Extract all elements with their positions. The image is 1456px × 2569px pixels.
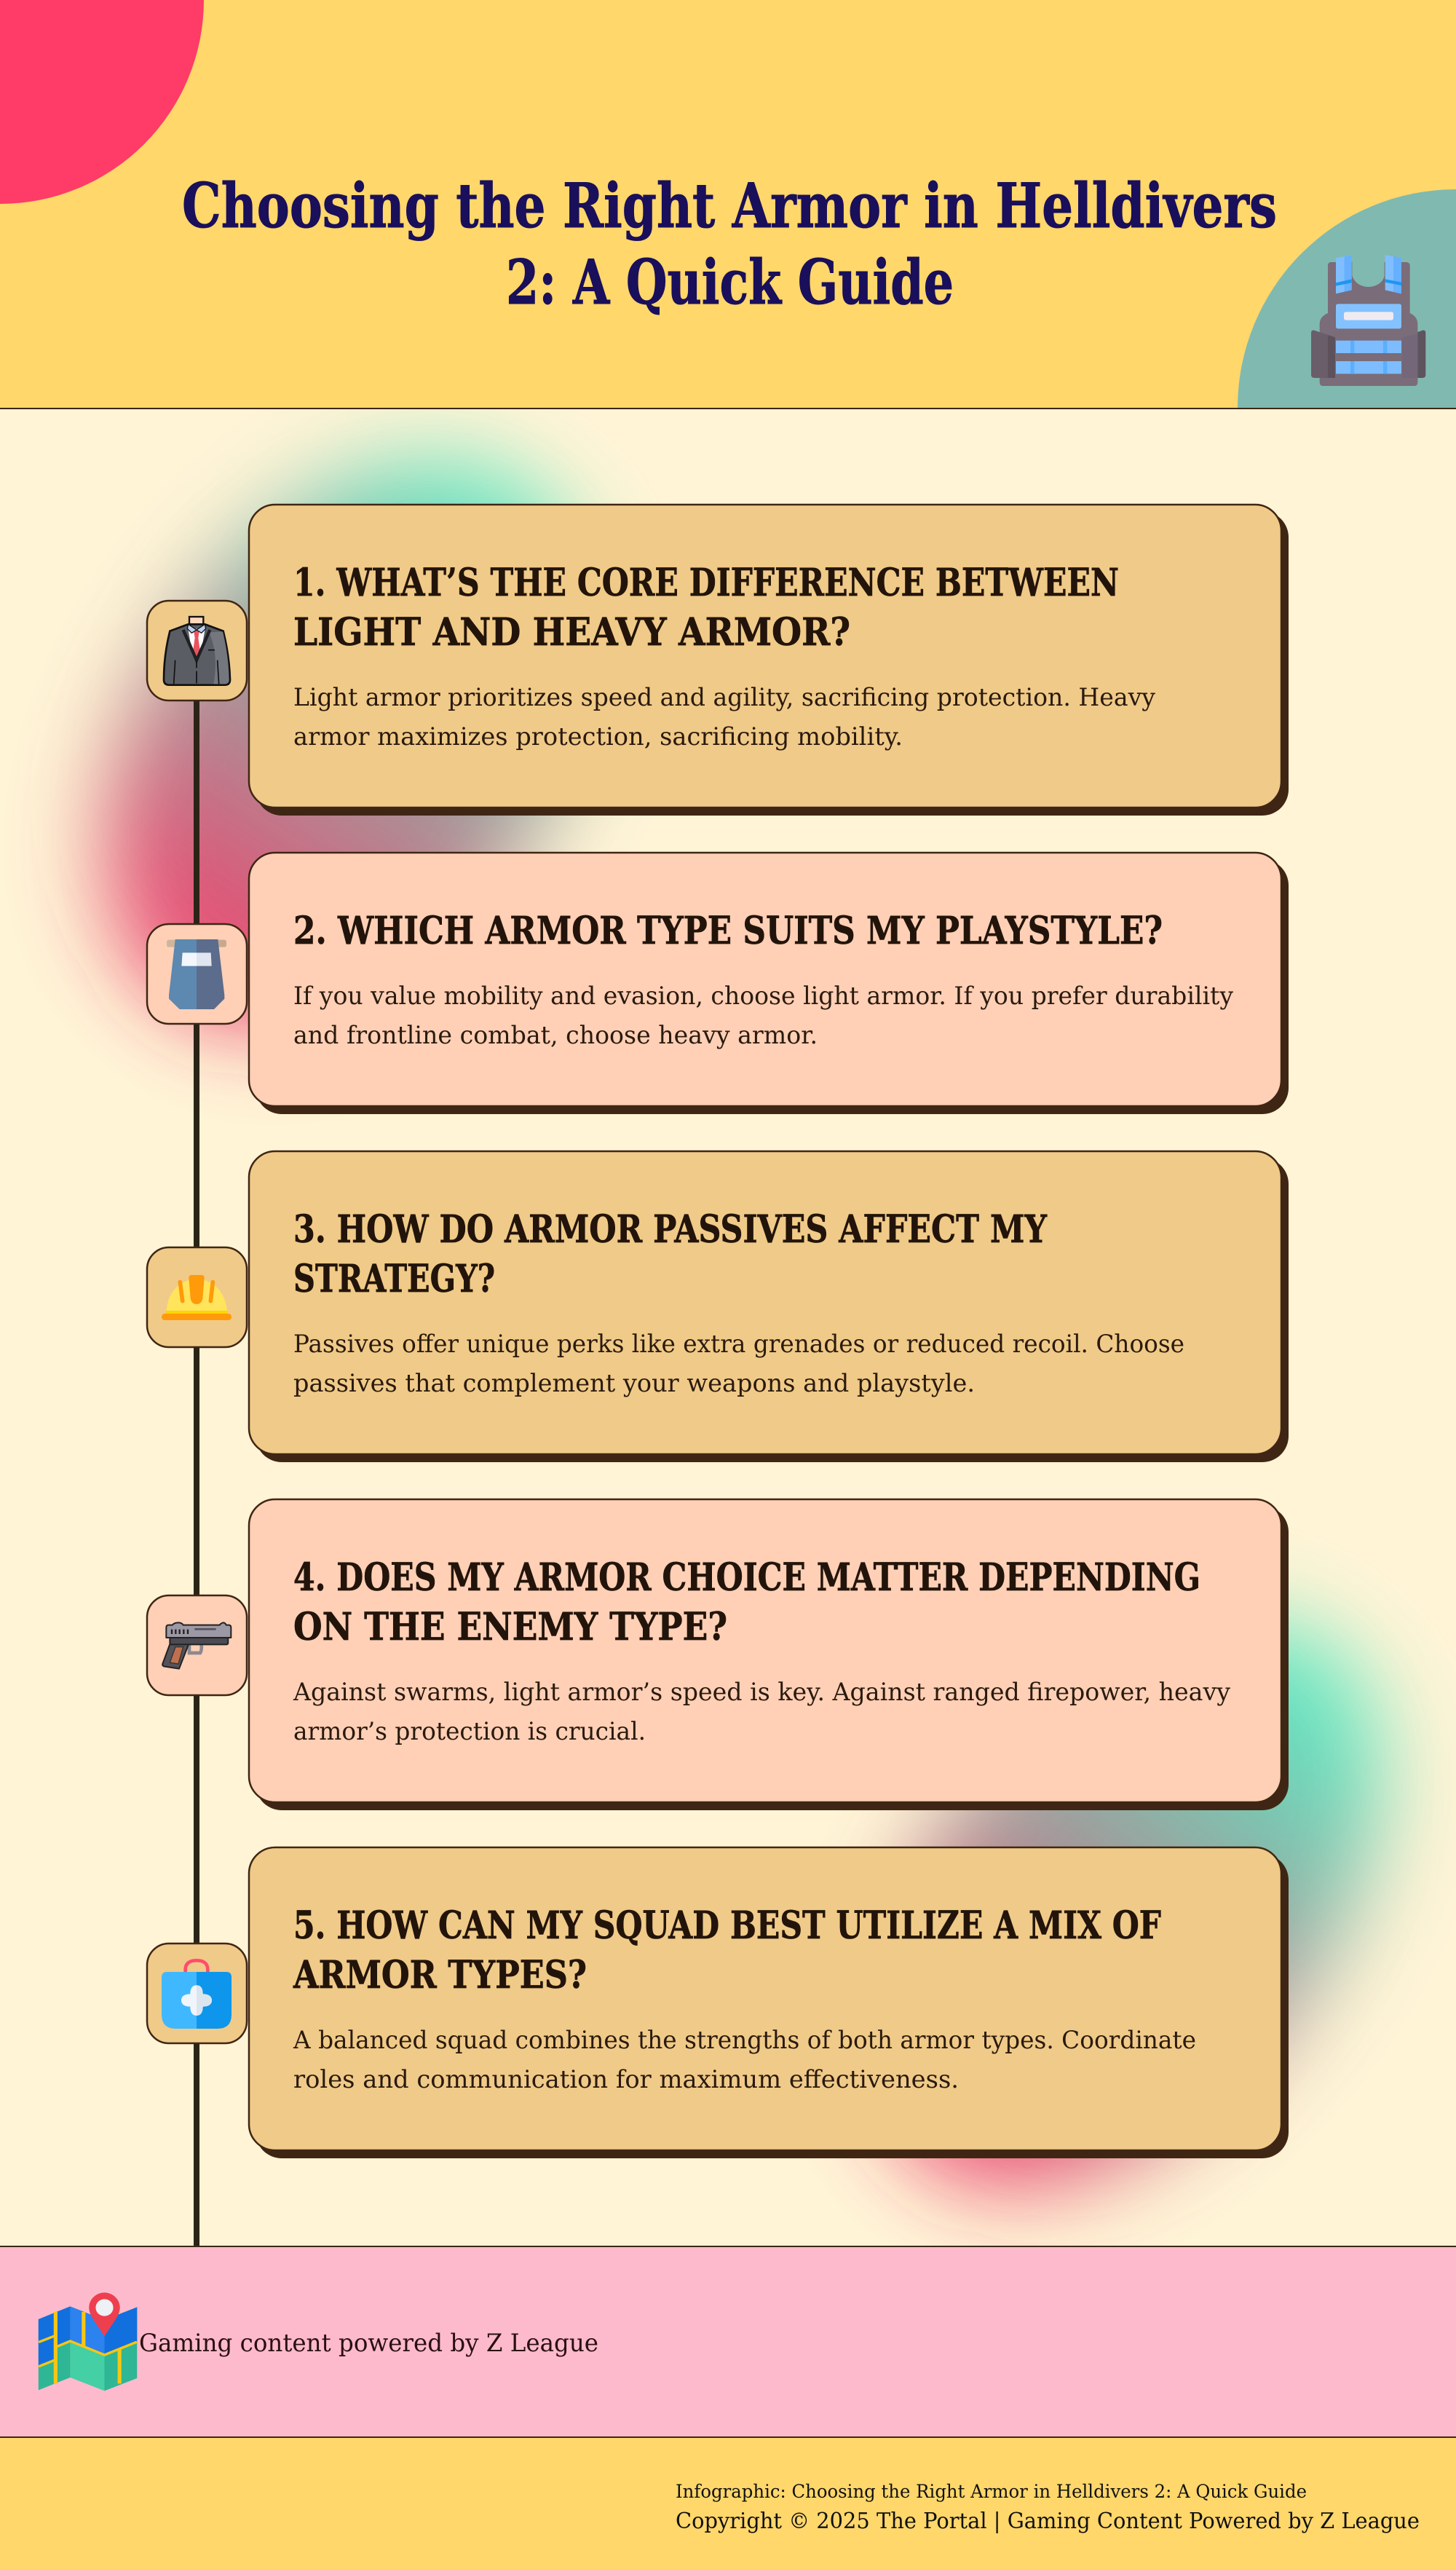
panel: question 1 [249, 505, 1289, 816]
body text 2: and frontline combat, choose heavy armor. [293, 1021, 818, 1050]
title: 2: A Quick Guide [506, 246, 954, 318]
icon: folded map with pin [39, 2292, 137, 2391]
title [182, 170, 1277, 318]
footer text: Copyright © 2025 The Portal | Gaming Content Powered by Z League [676, 2509, 1420, 2534]
body text 4: Against swarms, light armor’s speed is key. Against ranged firepower, heavy [293, 1678, 1231, 1707]
heading 4: ON THE ENEMY TYPE? [293, 1605, 727, 1649]
body text 3 [293, 1330, 1184, 1398]
heading 4 [293, 1555, 1200, 1649]
body text 2 [293, 982, 1234, 1050]
icon badge: pistol [147, 1595, 247, 1695]
icon badge: hard hat [147, 1247, 247, 1347]
heading 3: STRATEGY? [293, 1257, 495, 1301]
panel: question 3 [249, 1151, 1289, 1462]
icon badge: riot shield [147, 924, 247, 1024]
body text 1 [293, 683, 1156, 751]
panel: question 2 [249, 853, 1289, 1114]
body text 5: A balanced squad combines the strengths of both armor types. Coordinate [293, 2026, 1196, 2055]
icon badge: medkit [147, 1943, 247, 2043]
heading 1: 1. WHAT’S THE CORE DIFFERENCE BETWEEN [293, 561, 1119, 605]
body text 5: roles and communication for maximum effectiveness. [293, 2065, 959, 2094]
body text 2: If you value mobility and evasion, choose light armor. If you prefer durability [293, 982, 1234, 1011]
header band [0, 0, 1456, 409]
heading 5: 5. HOW CAN MY SQUAD BEST UTILIZE A MIX OF [293, 1903, 1161, 1948]
icon badge: business suit [147, 601, 247, 701]
icon: armor vest [1311, 255, 1425, 386]
heading 5 [293, 1903, 1161, 1997]
copyright footer band [0, 2438, 1456, 2569]
body text 1: Light armor prioritizes speed and agility, sacrificing protection. Heavy [293, 683, 1156, 712]
body text 4: armor’s protection is crucial. [293, 1717, 646, 1746]
footer text: Infographic: Choosing the Right Armor in Helldivers 2: A Quick Guide [676, 2481, 1307, 2502]
heading 3: 3. HOW DO ARMOR PASSIVES AFFECT MY [293, 1207, 1048, 1252]
heading 5: ARMOR TYPES? [293, 1953, 587, 1997]
panel: question 5 [249, 1847, 1289, 2158]
sponsor text: Gaming content powered by Z League [139, 2329, 598, 2358]
timeline line [194, 650, 199, 2246]
blurred background blobs [4, 370, 1456, 2281]
heading 1 [293, 561, 1119, 655]
footer text [676, 2481, 1420, 2534]
panel: question 4 [249, 1499, 1289, 1810]
heading 2: 2. WHICH ARMOR TYPE SUITS MY PLAYSTYLE? [293, 909, 1163, 953]
body text 4 [293, 1678, 1231, 1746]
body text 5 [293, 2026, 1196, 2094]
heading 4: 4. DOES MY ARMOR CHOICE MATTER DEPENDING [293, 1555, 1200, 1600]
heading 1: LIGHT AND HEAVY ARMOR? [293, 610, 850, 655]
body text 1: armor maximizes protection, sacrificing mobility. [293, 722, 903, 751]
heading 3 [293, 1207, 1048, 1301]
body text 3: Passives offer unique perks like extra grenades or reduced recoil. Choose [293, 1330, 1184, 1359]
sponsor footer band [0, 2246, 1456, 2438]
main background [0, 409, 1456, 2246]
body text 3: passives that complement your weapons and playstyle. [293, 1369, 975, 1398]
